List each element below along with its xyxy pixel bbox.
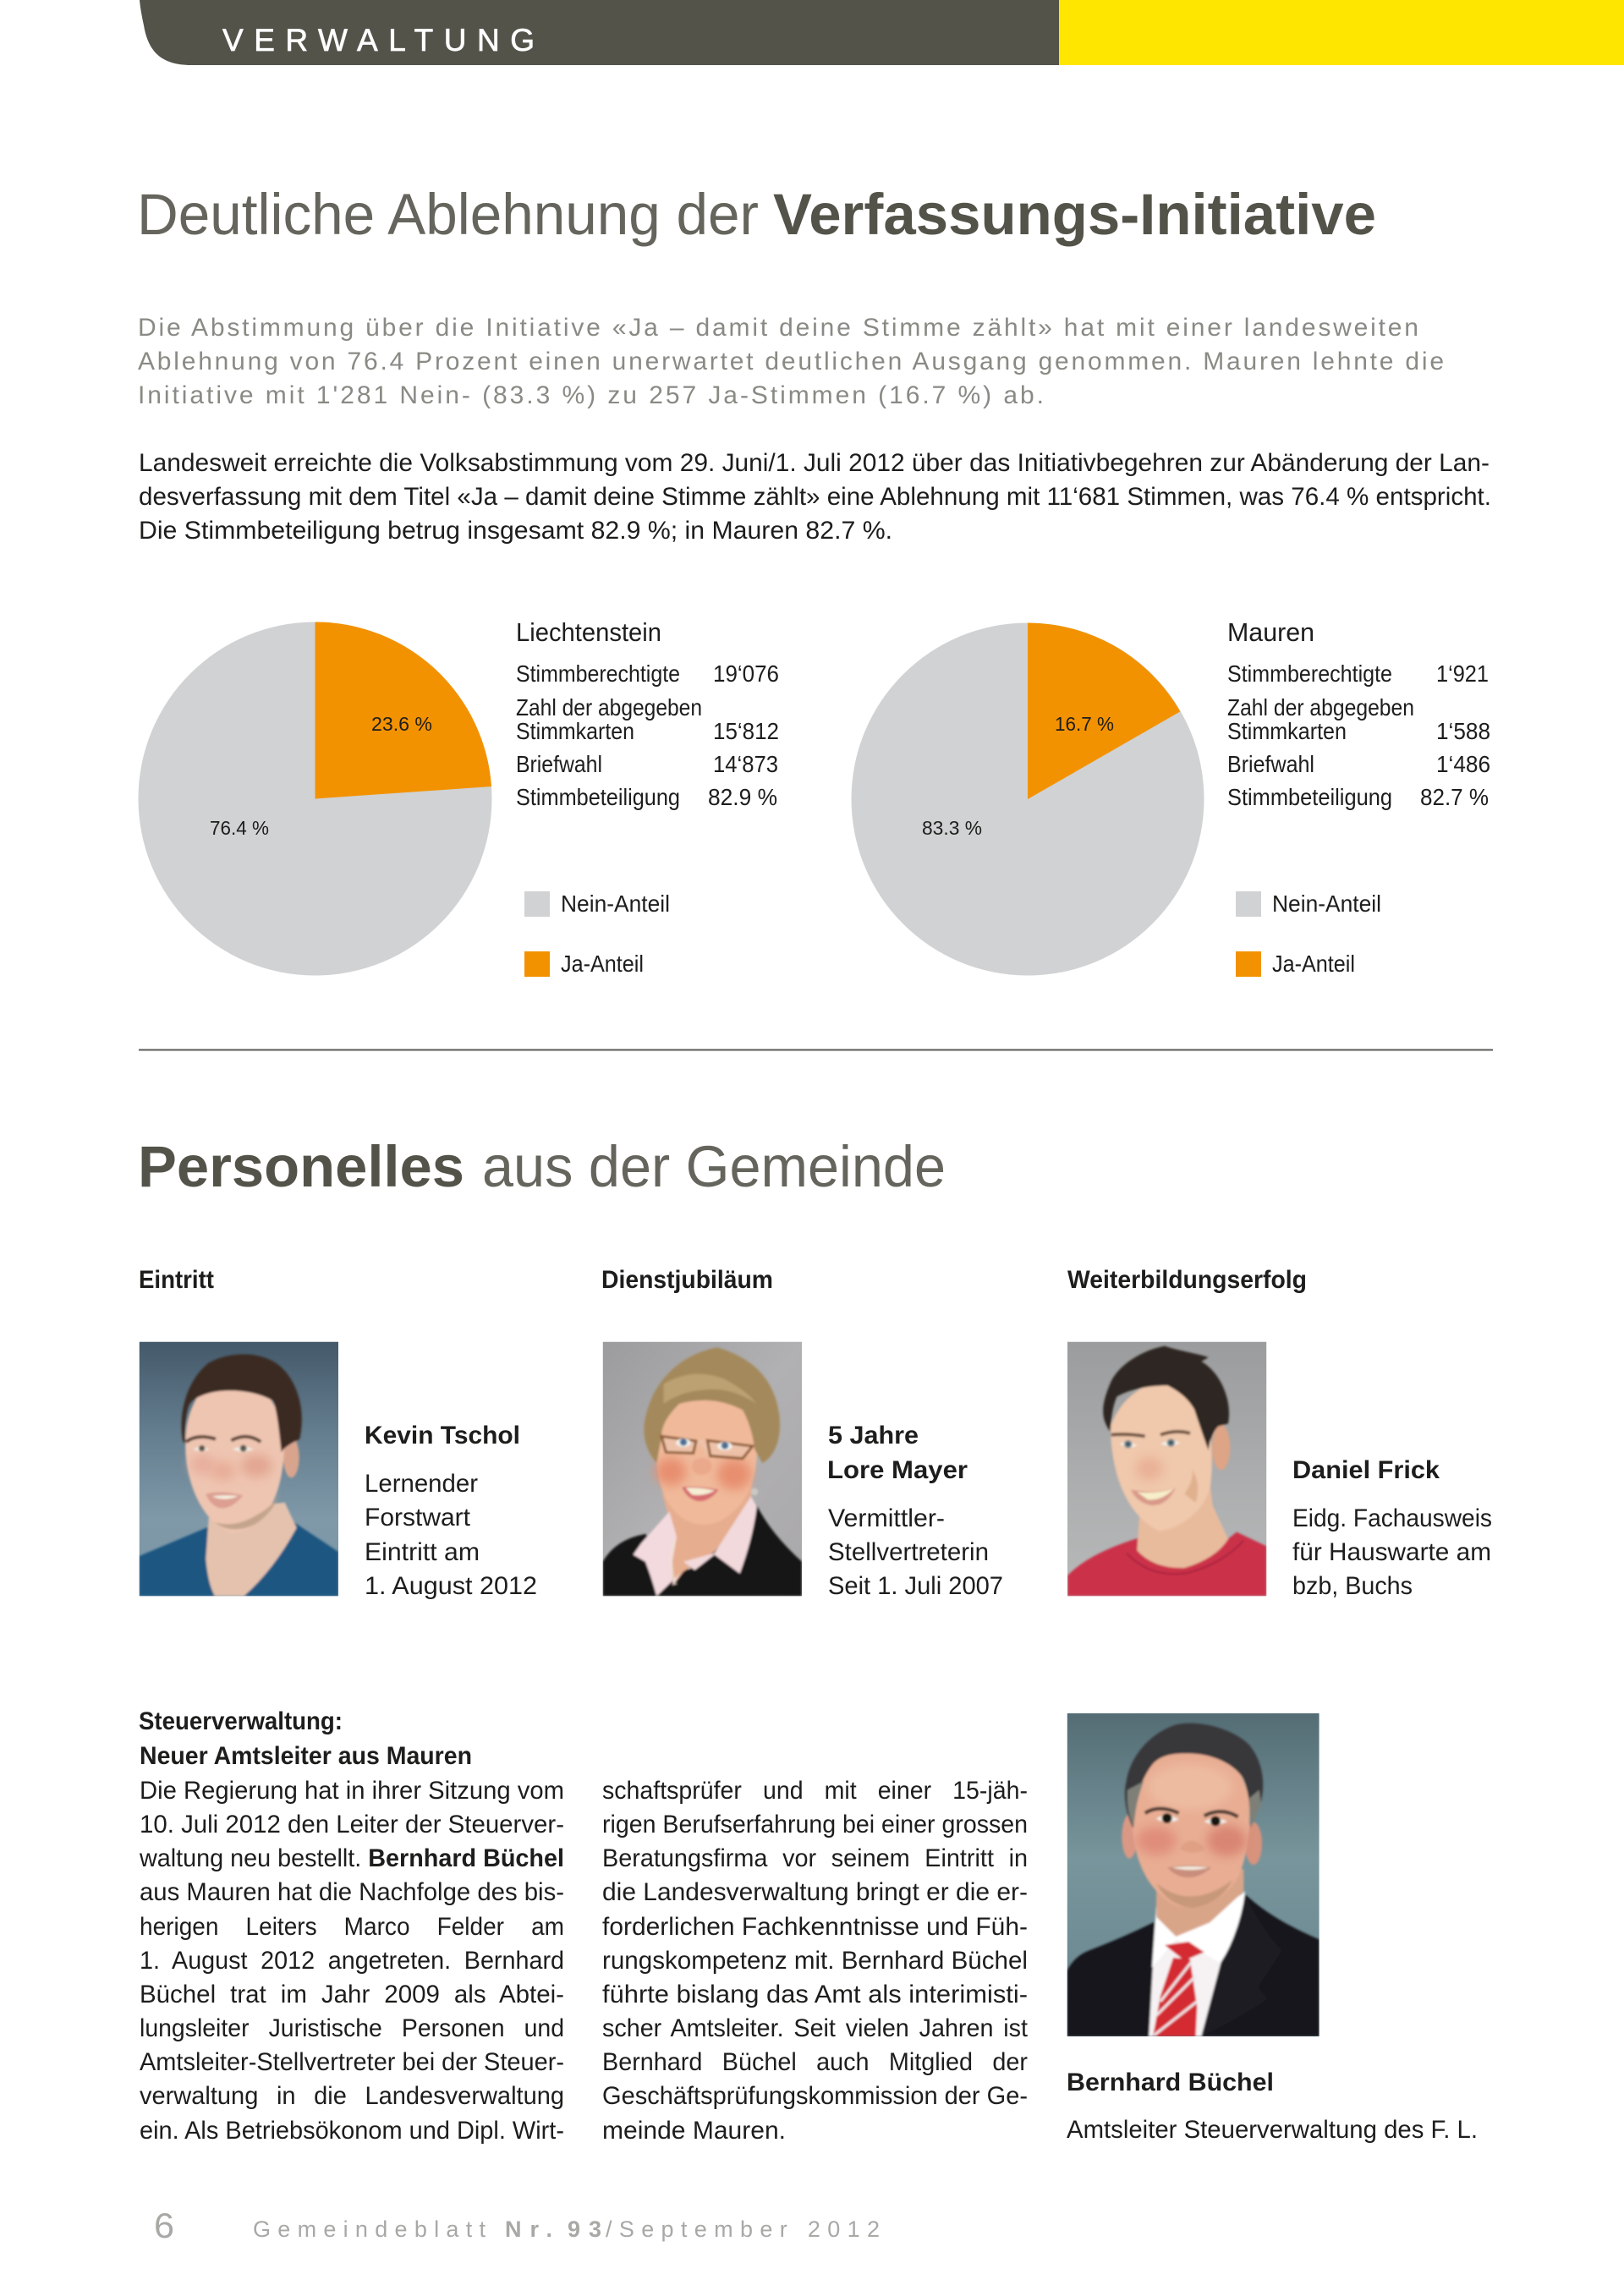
intro paragraph: Die Abstimmung über die Initiative «Ja – damit deine Stimme zählt» hat mit einer landesweiten bbox=[138, 314, 1418, 342]
heading: Personelles: aus der Gemeinde bbox=[482, 1134, 946, 1199]
article column 2: rungskompetenz mit. Bernhard Büchel bbox=[602, 1947, 1028, 1975]
intro paragraph bbox=[138, 314, 1444, 409]
data table: Mauren: 1‘486 bbox=[1436, 751, 1490, 777]
column headings: Dienstjubiläum bbox=[601, 1266, 773, 1294]
text: Kevin Tschol: 1. August 2012 bbox=[365, 1572, 537, 1600]
text: Lore Mayer: Seit 1. Juli 2007 bbox=[828, 1572, 1003, 1600]
heading: Personelles: Personelles bbox=[138, 1134, 464, 1199]
article column 2: scher Amtsleiter. Seit vielen Jahren ist bbox=[602, 2014, 1029, 2042]
body paragraph: desverfassung mit dem Titel «Ja – damit deine Stimme zählt» eine Ablehnung mit 11‘681 Stimmen, was 76.4 % entspricht. bbox=[139, 483, 1491, 511]
text: Lore Mayer: Vermittler- bbox=[828, 1504, 945, 1532]
caption: Bernhard Büchel: Bernhard Büchel bbox=[1067, 2069, 1274, 2096]
photo: Lore Mayer bbox=[603, 1342, 802, 1596]
article column 1: aus Mauren hat die Nachfolge des bis- bbox=[140, 1878, 564, 1906]
text: Daniel Frick: Daniel Frick bbox=[1292, 1456, 1440, 1484]
data table: Liechtenstein bbox=[516, 617, 779, 810]
article column 2: meinde Mauren. bbox=[602, 2117, 786, 2145]
pie chart: Liechtenstein bbox=[139, 622, 492, 976]
article column 1: herigen Leiters Marco Felder am bbox=[140, 1913, 564, 1941]
column headings: Eintritt bbox=[139, 1266, 214, 1294]
footer line bbox=[253, 2217, 880, 2242]
data table: Mauren: Briefwahl bbox=[1227, 751, 1314, 777]
data table: Liechtenstein: 82.9 % bbox=[708, 784, 777, 810]
article heading bbox=[139, 1707, 472, 1770]
text: Lore Mayer: Stellvertreterin bbox=[828, 1538, 989, 1566]
column headings bbox=[139, 1266, 1307, 1294]
article column 1: 10. Juli 2012 den Leiter der Steuerver- bbox=[140, 1811, 564, 1838]
photo: Daniel Frick bbox=[1067, 1342, 1266, 1596]
article column 2: Geschäftsprüfungskommission der Ge- bbox=[602, 2082, 1028, 2110]
pie chart: Mauren: 16.7 % bbox=[1055, 713, 1114, 735]
caption: Bernhard Büchel bbox=[1067, 2069, 1478, 2144]
column headings: Weiterbildungserfolg bbox=[1067, 1266, 1307, 1294]
intro paragraph: Initiative mit 1'281 Nein- (83.3 %) zu 257 Ja-Stimmen (16.7 %) ab. bbox=[138, 381, 1044, 409]
footer line: Gemeindeblatt bbox=[253, 2217, 486, 2242]
page number: 6 bbox=[154, 2206, 174, 2245]
text: Kevin Tschol: Lernender bbox=[365, 1470, 478, 1498]
legend: Mauren bbox=[1236, 890, 1381, 977]
data table: Liechtenstein: 15‘812 bbox=[713, 718, 779, 744]
photo: Kevin Tschol bbox=[140, 1342, 338, 1596]
article column 2: forderlichen Fachkenntnisse und Füh- bbox=[602, 1913, 1028, 1941]
article column 1: waltung neu bestellt. Bernhard Büchel bbox=[139, 1844, 564, 1872]
legend: Liechtenstein bbox=[524, 890, 670, 977]
article heading: Steuerverwaltung: bbox=[139, 1707, 343, 1735]
legend: Mauren: Nein-Anteil bbox=[1272, 890, 1381, 917]
pie chart: Mauren: 83.3 % bbox=[922, 817, 982, 839]
data table: Liechtenstein: Zahl der abgegeben bbox=[516, 694, 702, 721]
photo: Bernhard Büchel bbox=[1067, 1713, 1320, 2036]
article column 2: führte bislang das Amt als interimisti- bbox=[602, 1981, 1028, 2008]
data table: Mauren: 1‘921 bbox=[1436, 660, 1489, 687]
text: Daniel Frick: für Hauswarte am bbox=[1292, 1538, 1491, 1566]
body paragraph: Landesweit erreichte die Volksabstimmung vom 29. Juni/1. Juli 2012 über das Initiativbegehren zur Abänderung der Lan- bbox=[139, 449, 1490, 477]
pie chart: Liechtenstein: 76.4 % bbox=[210, 817, 269, 839]
article column 2: rigen Berufserfahrung bei einer grossen bbox=[602, 1811, 1028, 1838]
data table: Mauren: 1‘588 bbox=[1436, 718, 1490, 744]
section label: VERWALTUNG bbox=[222, 23, 535, 58]
text: Kevin Tschol: Eintritt am bbox=[365, 1538, 480, 1566]
article heading: Neuer Amtsleiter aus Mauren bbox=[140, 1742, 472, 1770]
data table: Mauren: Stimmbeteiligung bbox=[1227, 784, 1392, 810]
data table: Mauren: Stimmkarten bbox=[1227, 718, 1347, 744]
footer line: 93 bbox=[568, 2217, 601, 2242]
article column 2: Bernhard Büchel auch Mitglied der bbox=[602, 2048, 1028, 2076]
data table: Liechtenstein: Briefwahl bbox=[516, 751, 602, 777]
heading: Personelles bbox=[138, 1134, 946, 1199]
pie chart: Liechtenstein: 23.6 % bbox=[371, 713, 432, 735]
title bbox=[137, 182, 1376, 247]
text: Daniel Frick: Eidg. Fachausweis bbox=[1292, 1504, 1492, 1532]
data table: Liechtenstein: Stimmkarten bbox=[516, 718, 634, 744]
article column 1: Die Regierung hat in ihrer Sitzung vom bbox=[140, 1777, 564, 1805]
text: Lore Mayer bbox=[827, 1422, 1003, 1600]
body paragraph: Die Stimmbeteiligung betrug insgesamt 82.9 %; in Mauren 82.7 %. bbox=[139, 517, 892, 545]
text: Kevin Tschol: Forstwart bbox=[365, 1504, 471, 1532]
text: Daniel Frick bbox=[1292, 1456, 1492, 1600]
body paragraph bbox=[139, 449, 1491, 545]
legend: Liechtenstein: Nein-Anteil bbox=[561, 890, 670, 917]
text: Kevin Tschol bbox=[365, 1422, 537, 1600]
data table: Liechtenstein: Stimmberechtigte bbox=[516, 660, 680, 687]
footer line: Nr. bbox=[505, 2217, 552, 2242]
article column 1: verwaltung in die Landesverwaltung bbox=[140, 2082, 564, 2110]
data table: Mauren: Zahl der abgegeben bbox=[1227, 694, 1414, 721]
text: Daniel Frick: bzb, Buchs bbox=[1292, 1572, 1413, 1600]
data table: Liechtenstein: 19‘076 bbox=[713, 660, 779, 687]
data table: Mauren: 82.7 % bbox=[1420, 784, 1489, 810]
data table: Mauren: Mauren bbox=[1227, 617, 1314, 647]
article column 2: Beratungsfirma vor seinem Eintritt in bbox=[602, 1844, 1028, 1872]
article column 2: schaftsprüfer und mit einer 15-jäh- bbox=[602, 1777, 1028, 1805]
intro paragraph: Ablehnung von 76.4 Prozent einen unerwartet deutlichen Ausgang genommen. Mauren lehnte die bbox=[138, 348, 1444, 375]
text: Kevin Tschol: Kevin Tschol bbox=[365, 1422, 520, 1449]
text: Lore Mayer: Lore Mayer bbox=[827, 1456, 968, 1484]
legend: Mauren: Ja-Anteil bbox=[1272, 951, 1355, 977]
footer line: /September 2012 bbox=[606, 2217, 880, 2242]
data table: Mauren: Stimmberechtigte bbox=[1227, 660, 1392, 687]
data table: Liechtenstein: Stimmbeteiligung bbox=[516, 784, 680, 810]
article column 1: 1. August 2012 angetreten. Bernhard bbox=[140, 1947, 564, 1975]
data table: Mauren bbox=[1227, 617, 1490, 810]
legend: Liechtenstein: Ja-Anteil bbox=[561, 951, 644, 977]
title: Verfassungs-Initiative bbox=[773, 182, 1376, 247]
article column 1: lungsleiter Juristische Personen und bbox=[140, 2014, 564, 2042]
text: Lore Mayer: 5 Jahre bbox=[828, 1422, 919, 1449]
caption: Bernhard Büchel: Amtsleiter Steuerverwaltung des F. L. bbox=[1067, 2116, 1478, 2144]
article column 1: Büchel trat im Jahr 2009 als Abtei- bbox=[140, 1981, 564, 2008]
article column 2 bbox=[602, 1777, 1029, 2145]
article column 1 bbox=[139, 1777, 564, 2145]
article column 1: ein. Als Betriebsökonom und Dipl. Wirt- bbox=[140, 2117, 564, 2145]
title: Deutliche Ablehnung der bbox=[137, 182, 759, 247]
article column 1: Amtsleiter-Stellvertreter bei der Steuer- bbox=[140, 2048, 564, 2076]
pie chart: Mauren bbox=[851, 622, 1204, 976]
article: Steuerverwaltung bbox=[139, 1707, 1029, 2145]
header bar: section band bbox=[140, 0, 1624, 65]
data table: Liechtenstein: 14‘873 bbox=[713, 751, 778, 777]
data table: Liechtenstein: Liechtenstein bbox=[516, 617, 661, 647]
article column 2: die Landesverwaltung bringt er die er- bbox=[602, 1878, 1028, 1906]
